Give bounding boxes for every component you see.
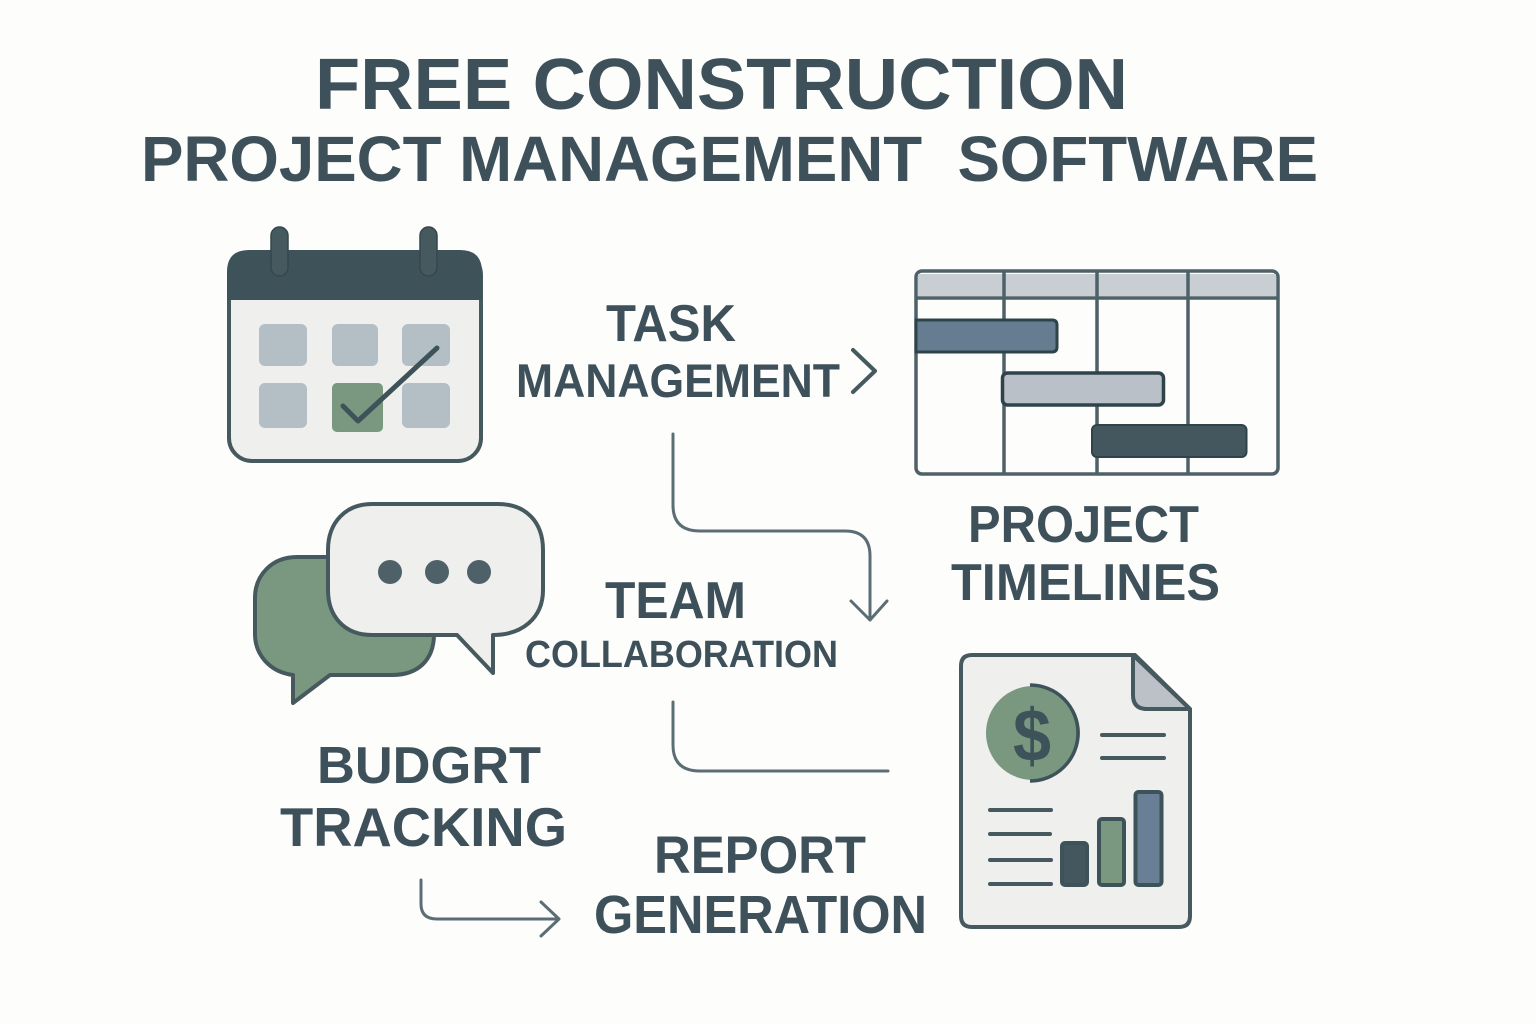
icon: gantt chart xyxy=(916,271,1278,474)
dollar coin: $ xyxy=(1013,694,1051,777)
label: budget tracking: BUDGRT xyxy=(317,737,541,795)
label: budget tracking xyxy=(280,737,567,858)
icon: chat bubbles xyxy=(255,504,543,703)
label: task management: TASK xyxy=(606,295,736,353)
title: FREE CONSTRUCTION xyxy=(315,45,1128,125)
label: report generation xyxy=(594,826,927,945)
label: task management: MANAGEMENT xyxy=(516,354,840,407)
title: PROJECT MANAGEMENT SOFTWARE xyxy=(141,123,1318,195)
label: team collaboration: COLLABORATION xyxy=(525,634,838,676)
dollar coin xyxy=(986,685,1080,781)
label: report generation: GENERATION xyxy=(594,885,927,945)
green speech bubble xyxy=(255,557,434,703)
arrow: task management to team collaboration xyxy=(673,434,887,620)
title xyxy=(141,45,1318,195)
label: project timelines xyxy=(951,496,1220,612)
label: budget tracking: TRACKING xyxy=(280,796,567,858)
icon: calendar xyxy=(227,227,482,461)
mini bar chart xyxy=(1062,792,1162,885)
label: project timelines: TIMELINES xyxy=(951,554,1220,612)
label: task management xyxy=(516,295,840,407)
light speech bubble xyxy=(328,504,543,673)
connector: team collaboration to report xyxy=(673,702,888,771)
label: project timelines: PROJECT xyxy=(968,496,1199,554)
label: team collaboration xyxy=(525,572,838,676)
arrow: chevron to project timelines xyxy=(853,350,875,392)
icon: budget report document xyxy=(961,655,1190,927)
arrow: budget tracking to report generation xyxy=(421,880,559,936)
label: team collaboration: TEAM xyxy=(605,572,746,630)
label: report generation: REPORT xyxy=(654,826,866,885)
